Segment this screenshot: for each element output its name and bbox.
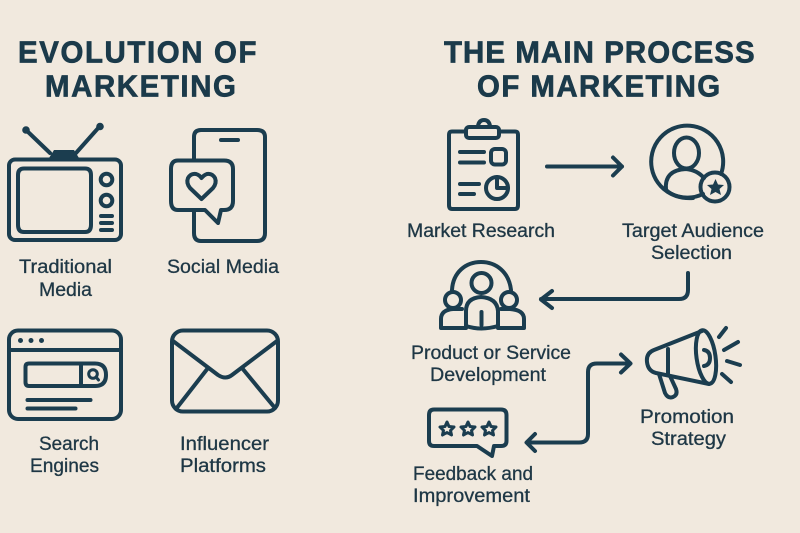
icon: television [9, 123, 121, 240]
label: promotion strategy: Strategy [651, 429, 727, 450]
label: search engines [30, 434, 99, 477]
label: traditional media: Traditional [19, 257, 112, 278]
label: feedback and improvement: Feedback and [413, 464, 533, 485]
label: target audience selection [622, 221, 764, 264]
label: search engines: Search [39, 434, 99, 455]
title: evolution of marketing [18, 36, 256, 104]
label: influencer platforms: Platforms [180, 456, 266, 477]
label: influencer platforms [180, 434, 270, 477]
icon: feedback bubble with stars [429, 410, 506, 456]
icon: browser search window [9, 330, 121, 419]
icon: clipboard with chart [449, 120, 518, 209]
label: product or service development: Development [430, 365, 547, 386]
label: target audience selection: Selection [651, 243, 732, 264]
label: product or service development [411, 343, 571, 386]
label: search engines: Engines [30, 456, 99, 477]
label: market research: Market Research [407, 221, 555, 242]
label: promotion strategy: Promotion [640, 407, 734, 428]
label: influencer platforms: Influencer [180, 434, 270, 455]
title: the main process of marketing: OF MARKETING [477, 70, 720, 104]
label: feedback and improvement: Improvement [413, 486, 531, 507]
icon: phone with heart bubble [171, 130, 265, 241]
label: traditional media: Media [39, 280, 92, 301]
arrow: audience to product [541, 273, 688, 308]
title: evolution of marketing: MARKETING [45, 70, 236, 104]
arrow: research to audience [547, 158, 622, 176]
title: evolution of marketing: EVOLUTION OF [18, 36, 256, 70]
title: the main process of marketing: THE MAIN PROCESS [444, 36, 755, 70]
label: social media: Social Media [167, 257, 279, 278]
label: traditional media [19, 257, 112, 301]
label: promotion strategy [640, 407, 734, 450]
label: target audience selection: Target Audience [622, 221, 764, 242]
icon: target audience person with star [651, 126, 730, 202]
icon: megaphone [647, 328, 740, 398]
label: feedback and improvement [413, 464, 533, 507]
title: the main process of marketing [444, 36, 755, 104]
label: product or service development: Product or Service [411, 343, 571, 364]
arrow: feedback and promotion link [526, 354, 630, 451]
icon: team group [441, 262, 524, 328]
icon: envelope [172, 330, 278, 412]
